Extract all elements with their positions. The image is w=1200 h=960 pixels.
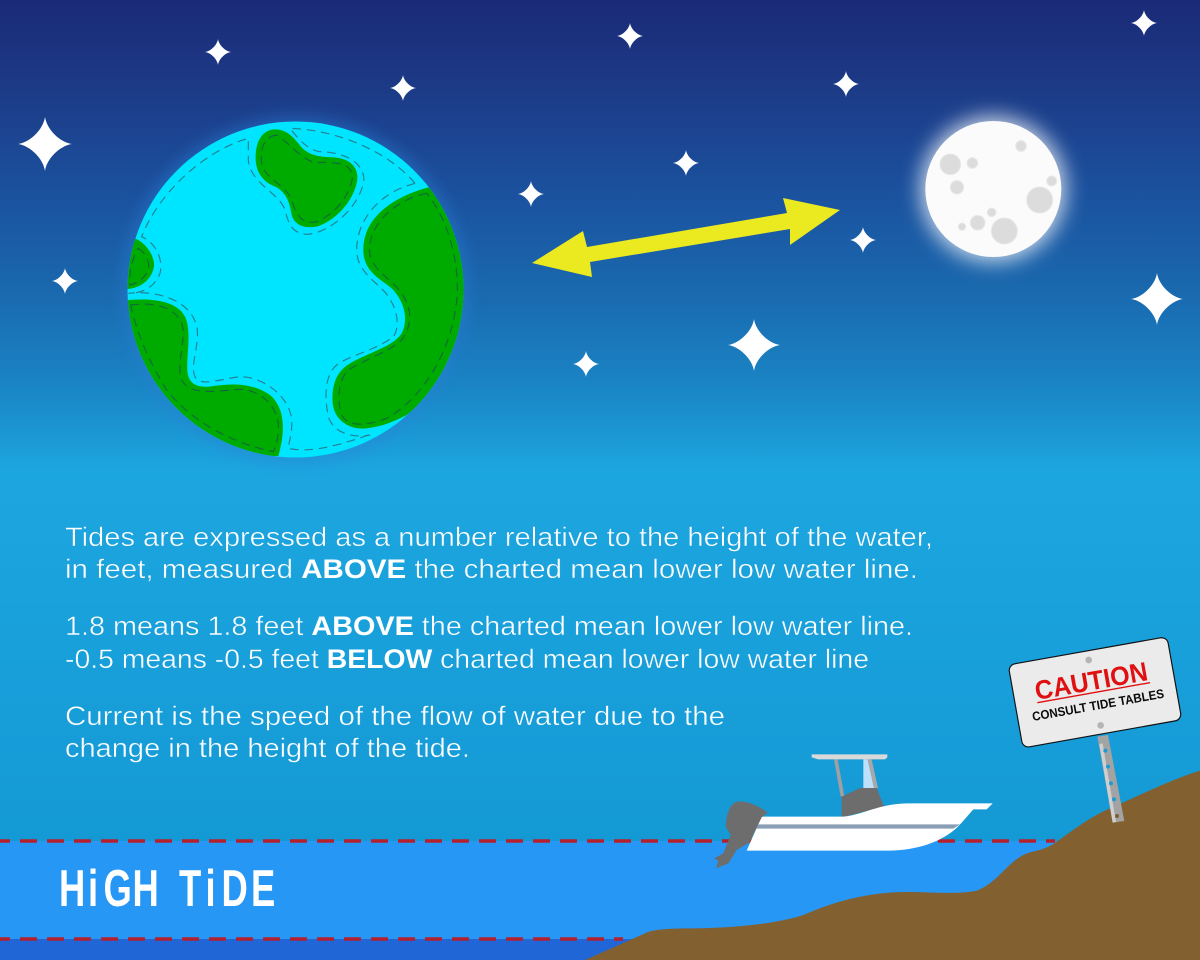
land masses <box>120 129 467 456</box>
caution sign <box>1008 637 1182 748</box>
paragraph 3: Current is the speed of the flow of water due to the <box>65 701 725 731</box>
paragraph 3: change in the height of the tide. <box>65 733 470 763</box>
paragraph 1: in feet, measured ABOVE the charted mean lower low water line. <box>65 554 918 584</box>
explanatory text <box>65 522 933 763</box>
coast dashes on ocean <box>128 128 415 450</box>
ground <box>585 771 1200 960</box>
sign post <box>1097 735 1124 823</box>
shore scene <box>585 637 1200 960</box>
label: high tide: HiGH TiDE <box>59 858 275 918</box>
paragraph 3 <box>65 701 725 763</box>
arrow: earth to moon distance <box>532 198 840 277</box>
earth <box>120 116 469 464</box>
paragraph 2: 1.8 means 1.8 feet ABOVE the charted mean lower low water line. <box>65 611 913 641</box>
stars <box>18 10 1183 377</box>
moon <box>920 116 1066 262</box>
caution text: CAUTION <box>1032 656 1150 706</box>
paragraph 2: -0.5 means -0.5 feet BELOW charted mean lower low water line <box>65 644 869 674</box>
consult text: CONSULT TIDE TABLES <box>1031 687 1165 724</box>
paragraph 1: Tides are expressed as a number relative to the height of the water, <box>65 522 933 552</box>
paragraph 2 <box>65 611 913 674</box>
low tide line <box>0 937 623 941</box>
deep water <box>0 939 1200 960</box>
high tide line <box>0 839 1055 843</box>
coast dashes on land <box>130 135 457 452</box>
paragraph 1 <box>65 522 933 584</box>
boat <box>714 754 993 868</box>
water band <box>0 841 1200 939</box>
